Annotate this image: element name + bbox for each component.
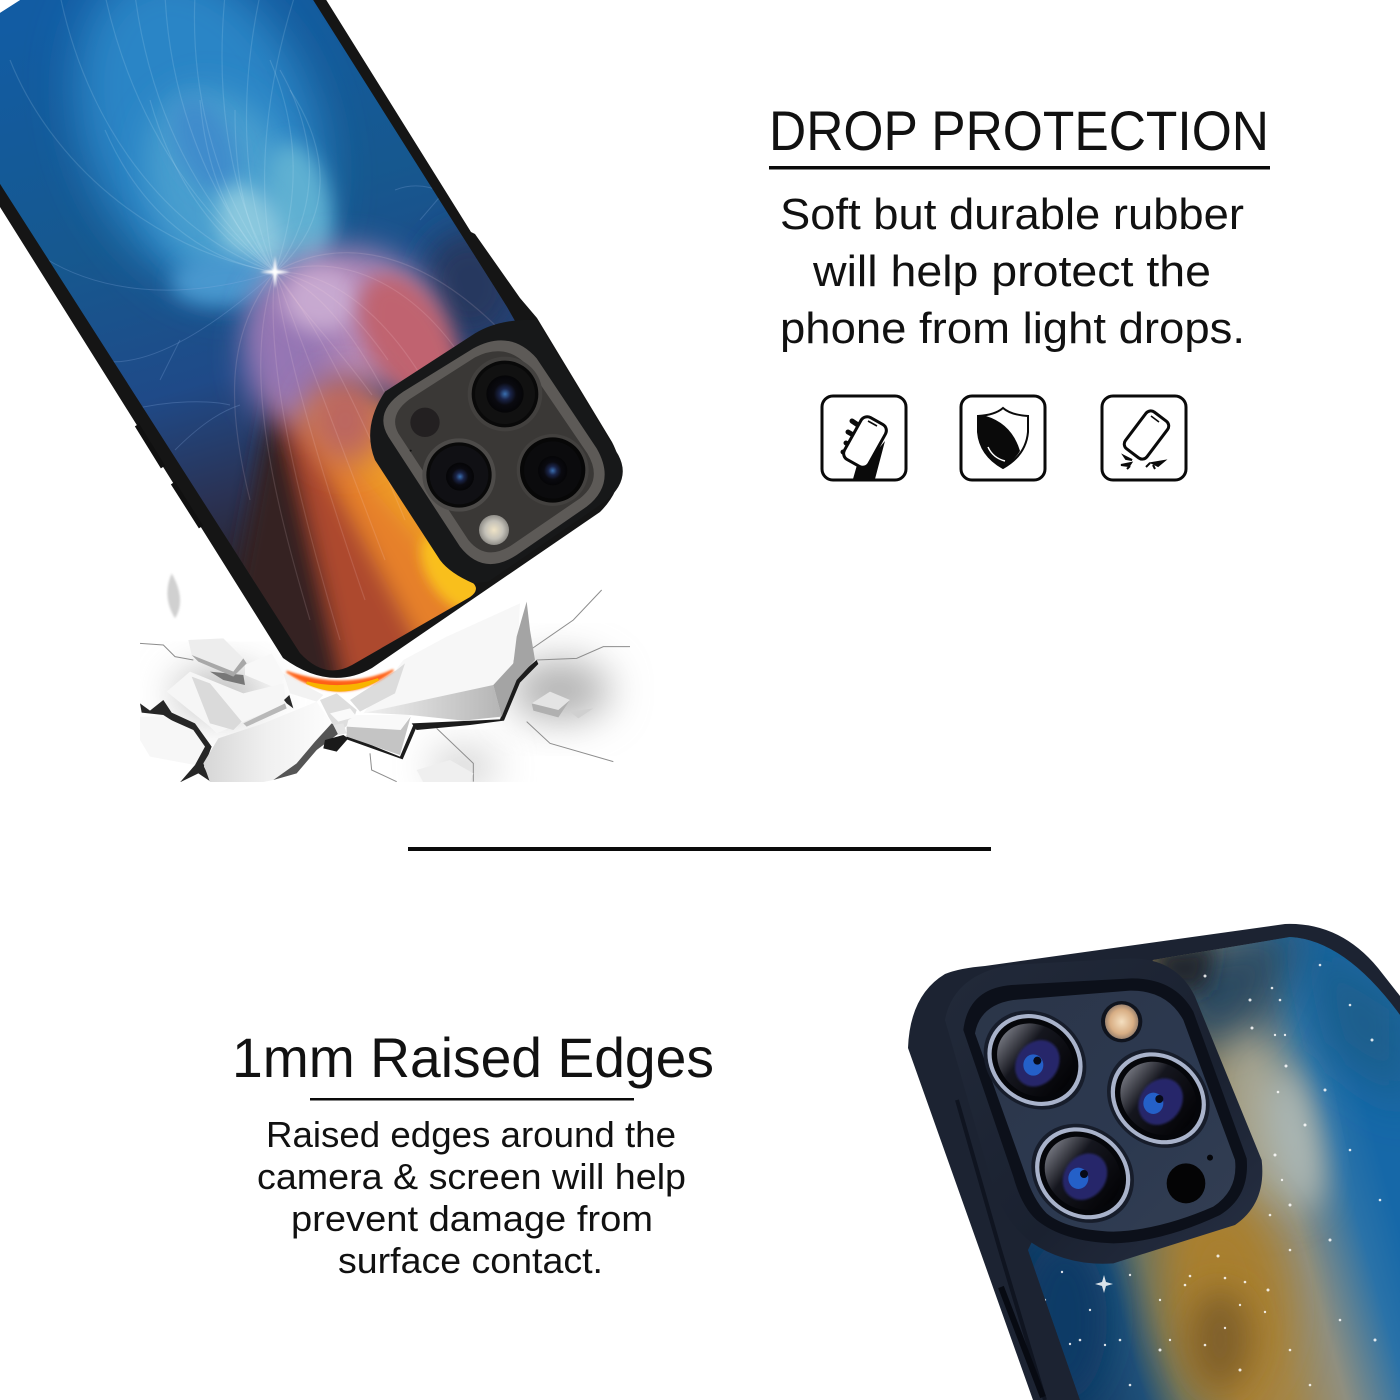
microphone hole xyxy=(1167,1163,1205,1203)
colour wedges radiating from star xyxy=(235,386,476,670)
phone with case: drop protection xyxy=(0,0,623,678)
icon: falling phone impact xyxy=(1102,396,1186,480)
text: raised edges description xyxy=(257,1114,686,1281)
section divider xyxy=(408,847,991,851)
text: drop protection description: will help protect the xyxy=(812,247,1211,296)
centre star xyxy=(260,256,290,288)
camera module xyxy=(945,958,1262,1264)
fine light threads xyxy=(10,0,320,272)
lens right xyxy=(1087,1028,1230,1168)
phone back artwork xyxy=(1020,925,1400,1400)
text: raised edges description: prevent damage from xyxy=(291,1198,653,1239)
phone case body xyxy=(0,0,620,678)
text: raised edges description: camera & screen will help xyxy=(257,1156,686,1197)
text: drop protection description: phone from light drops. xyxy=(780,304,1245,353)
phone back artwork xyxy=(0,0,515,670)
star field xyxy=(1044,964,1381,1386)
lens top left xyxy=(964,990,1106,1130)
icon: hand holding phone xyxy=(822,396,906,480)
flash xyxy=(1101,1001,1142,1042)
heading: drop protection: DROP PROTECTION xyxy=(769,99,1269,162)
icon: shield xyxy=(961,396,1045,480)
text: drop protection description: Soft but durable rubber xyxy=(780,190,1244,239)
lens bottom xyxy=(1011,1103,1154,1243)
text: raised edges description: Raised edges around the xyxy=(266,1114,676,1155)
text: raised edges description: surface contact. xyxy=(338,1240,603,1281)
side button slot xyxy=(1001,1287,1043,1397)
text: drop protection description xyxy=(780,190,1245,353)
camera module xyxy=(370,320,623,583)
phone case body xyxy=(908,924,1400,1400)
heading: raised edges: 1mm Raised Edges xyxy=(232,1026,714,1089)
phone with case: raised edges xyxy=(908,924,1400,1400)
side buttons xyxy=(137,425,201,527)
cracked ground illustration xyxy=(140,573,630,783)
